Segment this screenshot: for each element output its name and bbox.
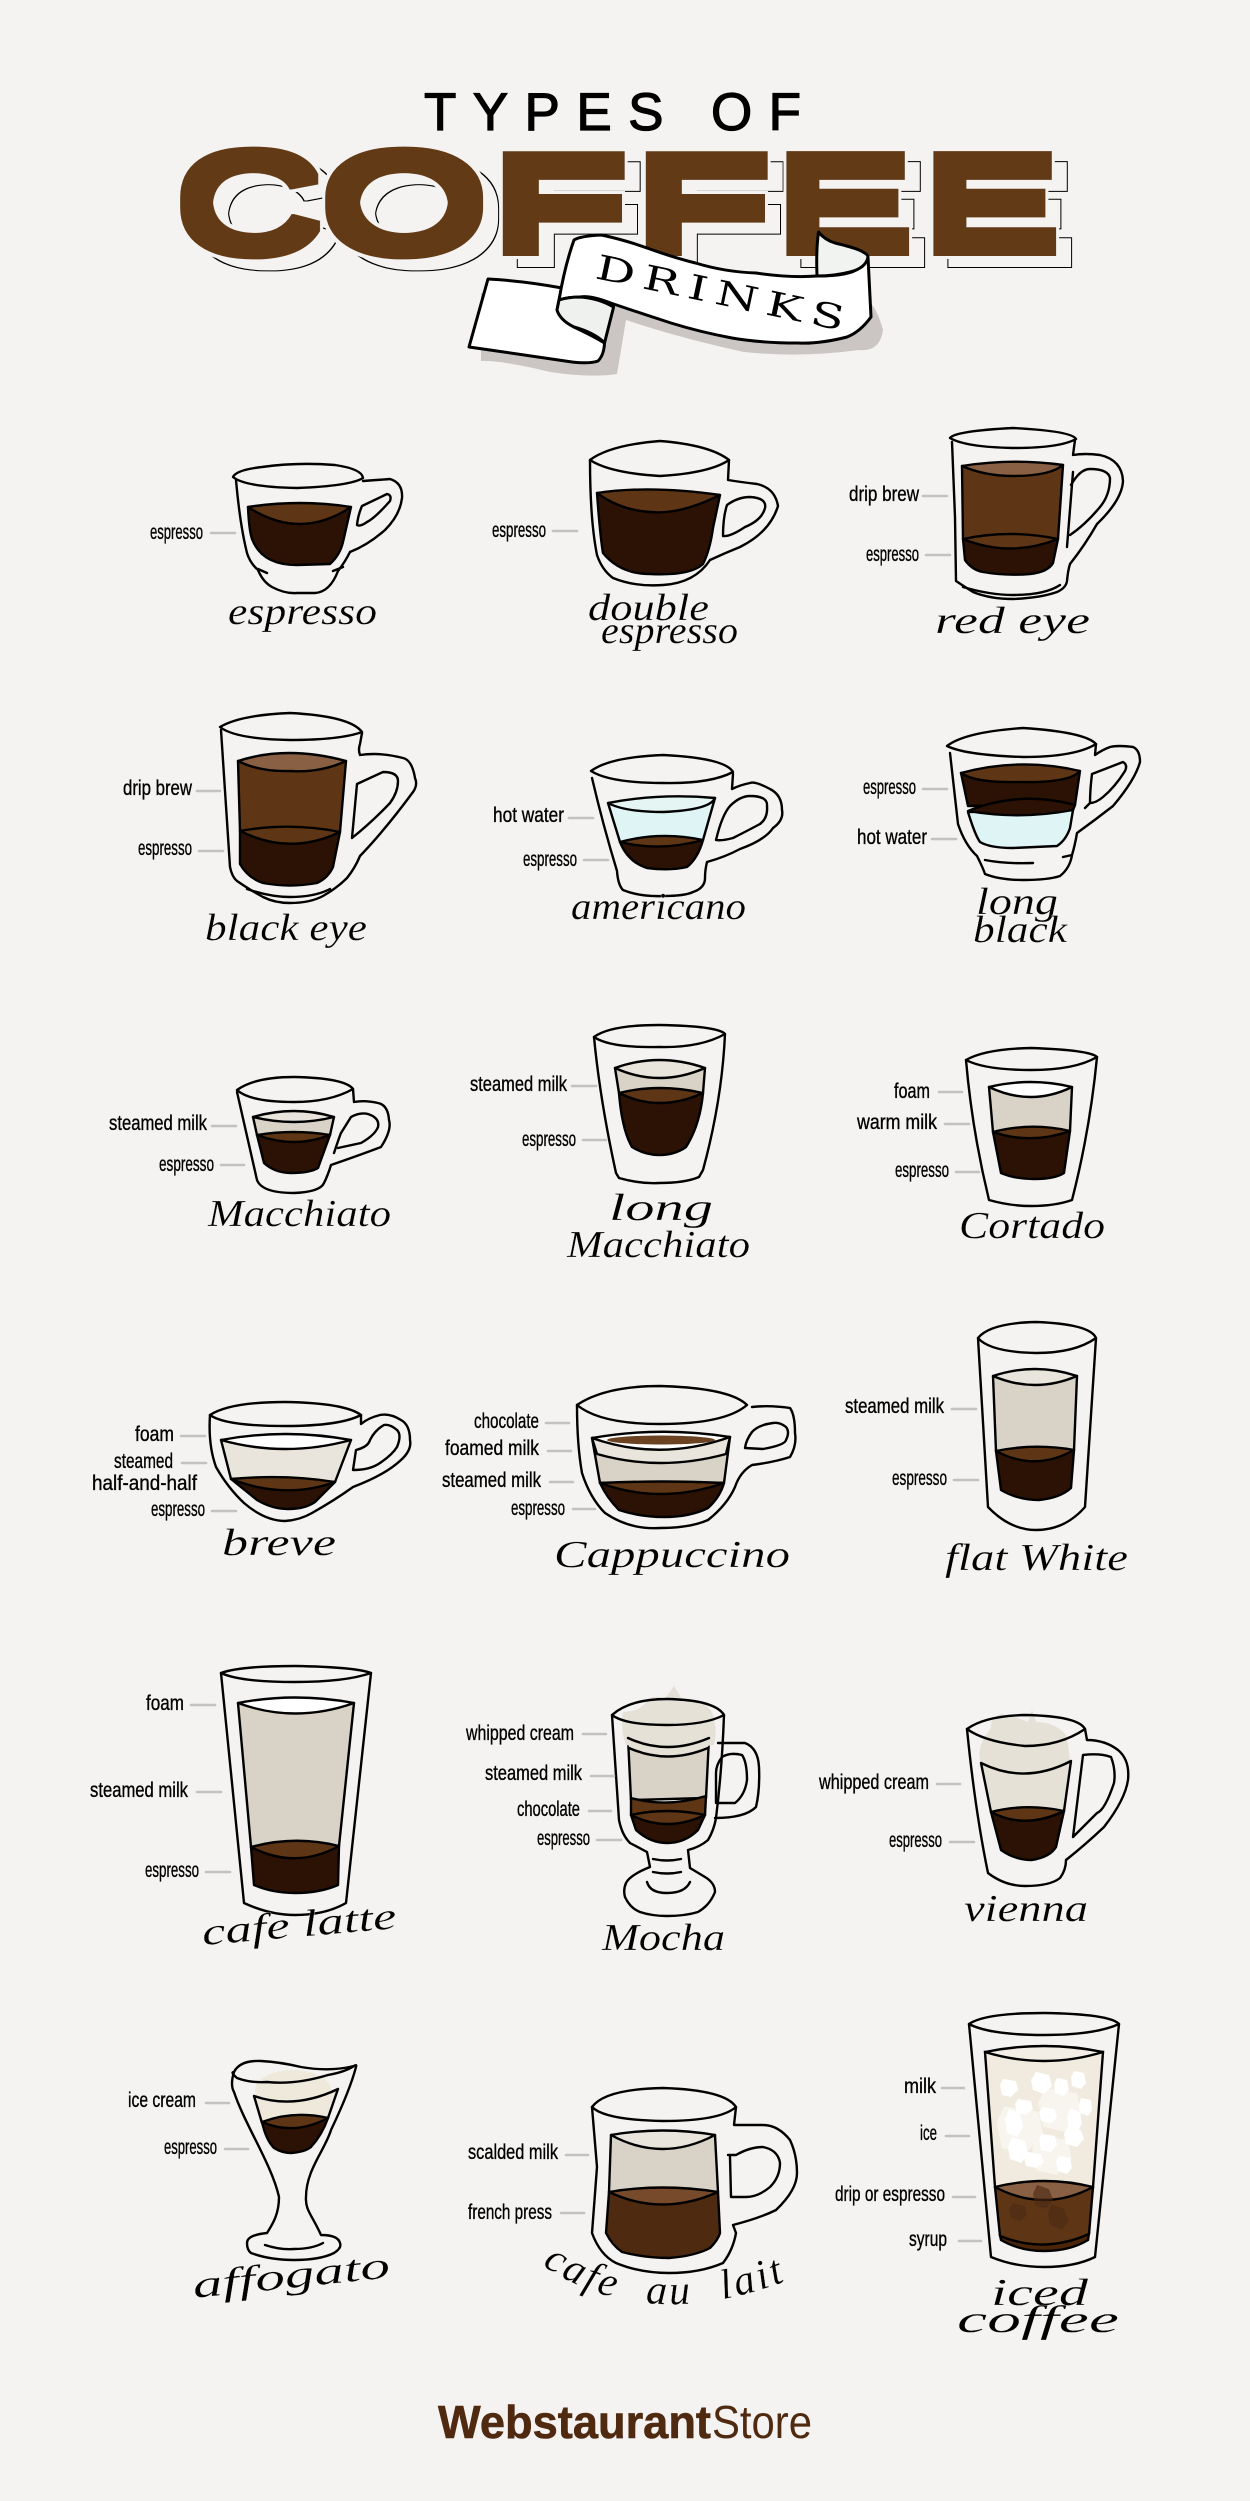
label: foam (135, 1423, 205, 1446)
label: steamed milk: steamed milk (470, 1073, 567, 1096)
label: espresso: espresso (892, 1467, 947, 1490)
label: syrup: syrup (909, 2228, 947, 2251)
drink name: cafe au lait: cafe au lait (545, 2254, 784, 2305)
label: espresso: espresso (164, 2136, 217, 2159)
drink name: red eye: red eye (935, 600, 1090, 642)
drink: americano (493, 755, 782, 928)
drink name: long macchiato: Macchiato (566, 1224, 750, 1266)
label: foamed milk: foamed milk (445, 1437, 539, 1460)
label: steamed half-and-half: steamed (114, 1450, 173, 1473)
label: drip or espresso: drip or espresso (835, 2183, 945, 2206)
label: espresso: espresso (159, 1153, 214, 1176)
label: espresso: espresso (863, 776, 916, 799)
label: steamed half-and-half: half-and-half (92, 1472, 197, 1495)
drink: affogato (128, 2061, 392, 2307)
drink name: long black: black (973, 909, 1068, 951)
drink name: long black: long (976, 881, 1058, 923)
label: ice cream: ice cream (128, 2089, 196, 2112)
drink: long black (857, 728, 1140, 951)
label: milk (904, 2075, 964, 2098)
drink name: mocha: Mocha (601, 1917, 725, 1959)
label: espresso: espresso (866, 543, 919, 566)
banner: drinks (469, 232, 883, 376)
drink: cafe latte (90, 1666, 398, 1954)
label: foam: foam (135, 1423, 174, 1446)
drink name: cappuccino: Cappuccino (554, 1534, 790, 1576)
label: espresso: espresso (522, 1128, 576, 1151)
drink name: cafe latte: cafe latte (200, 1895, 398, 1954)
title: coffee: F (488, 130, 632, 277)
label: espresso: espresso (895, 1159, 949, 1182)
label: steamed milk: steamed milk (845, 1395, 944, 1418)
label: foam: foam (146, 1692, 184, 1715)
banner label: drinks: DRINKS (592, 247, 857, 340)
label: chocolate: chocolate (517, 1798, 580, 1821)
drink: red eye (849, 428, 1123, 642)
title: coffee (172, 122, 1064, 284)
label: espresso: espresso (151, 1498, 205, 1521)
drink: vienna (818, 1710, 1128, 1930)
title: coffee: F (631, 130, 775, 277)
drink: double espresso (492, 441, 778, 652)
drink: cappuccino (442, 1386, 795, 1576)
logo: webstaurantstore: Webstaurant (438, 2396, 711, 2448)
label: chocolate: chocolate (474, 1410, 539, 1433)
label: espresso: espresso (150, 521, 203, 544)
label: hot water: hot water (857, 826, 927, 849)
label: drip brew: drip brew (849, 483, 920, 506)
drink name: americano: americano (571, 886, 746, 928)
label: hot water: hot water (493, 804, 564, 827)
drink name: black eye: black eye (205, 907, 367, 949)
drink name: double espresso: espresso (601, 610, 738, 652)
drink name: flat white: flat White (945, 1537, 1128, 1579)
label: steamed milk: steamed milk (109, 1112, 207, 1135)
label: foam: foam (894, 1080, 930, 1103)
drink: cafe au lait (468, 2086, 798, 2305)
label: whipped cream: whipped cream (818, 1771, 929, 1794)
drink name: espresso: espresso (228, 591, 377, 633)
drink: flat white (845, 1322, 1128, 1579)
drink name: long black (973, 881, 1068, 951)
label: espresso: espresso (537, 1827, 590, 1850)
ice cubes (997, 2071, 1092, 2175)
drink name: double espresso: double (588, 587, 709, 629)
label: foam (146, 1692, 215, 1715)
label: scalded milk: scalded milk (468, 2141, 558, 2164)
label: ice: ice (920, 2122, 937, 2145)
label: drip brew: drip brew (123, 777, 193, 800)
label: steamed milk: steamed milk (442, 1469, 541, 1492)
label: espresso: espresso (523, 848, 577, 871)
label: warm milk: warm milk (856, 1111, 937, 1134)
drink: iced coffee (835, 2013, 1119, 2341)
label: foam (894, 1080, 962, 1103)
drink name: vienna: vienna (964, 1888, 1088, 1930)
label: steamed milk: steamed milk (485, 1762, 582, 1785)
logo: webstaurantstore: Store (712, 2396, 812, 2448)
label: milk: milk (904, 2075, 936, 2098)
drink: cortado (856, 1048, 1105, 1247)
drink: long macchiato (470, 1025, 750, 1266)
drink name: iced coffee: coffee (957, 2299, 1119, 2341)
title: coffee: C (172, 122, 325, 284)
label: espresso: espresso (492, 519, 546, 542)
label: espresso: espresso (145, 1859, 199, 1882)
title: types of: TYPES OF (424, 83, 801, 142)
drink name: double espresso (588, 587, 738, 652)
label: espresso: espresso (138, 837, 192, 860)
title: coffee: E (773, 129, 917, 277)
label: steamed milk: steamed milk (90, 1779, 188, 1802)
title: coffee: E (920, 129, 1064, 277)
drink: macchiato (109, 1077, 391, 1235)
drink name: cortado: Cortado (959, 1205, 1105, 1247)
drink name: iced coffee: iced (991, 2272, 1090, 2314)
drink name: breve: breve (222, 1522, 336, 1564)
label: espresso: espresso (511, 1497, 565, 1520)
drink: breve (92, 1402, 410, 1564)
title: coffee: O (317, 122, 492, 284)
drink: black eye (123, 713, 416, 949)
drink name: macchiato: Macchiato (207, 1193, 391, 1235)
label: espresso: espresso (889, 1829, 942, 1852)
drink: espresso (150, 464, 402, 633)
drink name: iced coffee (957, 2272, 1119, 2341)
drink name: long macchiato: long (609, 1187, 713, 1229)
drink name: affogato: affogato (191, 2244, 392, 2307)
label: steamed half-and-half (92, 1450, 206, 1495)
drink name: long macchiato (566, 1187, 750, 1266)
drink: mocha (465, 1686, 759, 1959)
label: ice (920, 2122, 969, 2145)
label: french press: french press (468, 2201, 552, 2224)
dark ice cubes (1009, 2185, 1069, 2230)
label: whipped cream: whipped cream (465, 1722, 574, 1745)
